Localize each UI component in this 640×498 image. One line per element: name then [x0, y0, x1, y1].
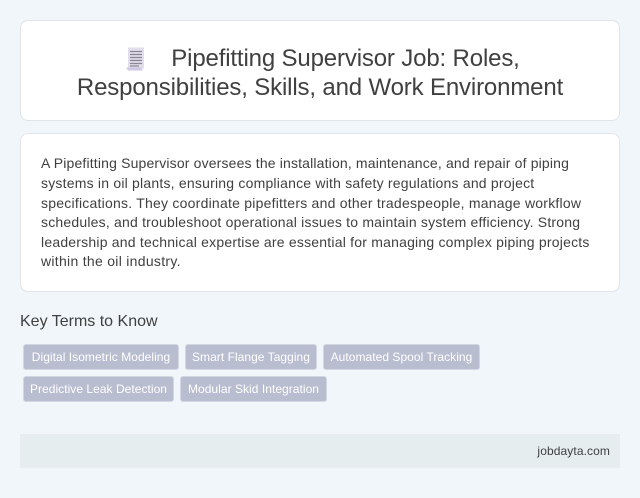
tag: digital isometric modeling [23, 344, 179, 370]
tag: predictive leak detection: Predictive Leak Detection [30, 382, 167, 396]
tag: modular skid integration [180, 376, 327, 402]
tag: modular skid integration: Modular Skid Integration [188, 382, 319, 396]
panel: title card [20, 20, 620, 121]
title: Responsibilities, Skills, and Work Environment [77, 74, 563, 101]
tag: digital isometric modeling: Digital Isometric Modeling [32, 350, 170, 364]
tag: smart flange tagging: Smart Flange Tagging [192, 350, 310, 364]
heading: key terms: Key Terms to Know [20, 313, 158, 330]
tag: automated spool tracking [323, 344, 480, 370]
text block: description: systems in oil plants, ensuring compliance with safety regulations and project [41, 175, 534, 191]
footer: site name: jobdayta.com [537, 444, 610, 458]
title [77, 45, 564, 101]
text block: description: leadership and technical expertise are essential for managing complex piping projects [41, 234, 590, 250]
tag: predictive leak detection [23, 376, 174, 402]
text block: description: A Pipefitting Supervisor oversees the installation, maintenance, and repair of piping [41, 155, 569, 171]
text block: description [41, 155, 590, 269]
title: Pipefitting Supervisor Job: Roles, [171, 45, 520, 72]
panel: description card [20, 133, 620, 292]
text block: description: specifications. They coordinate pipefitters and other tradespeople, manage workflow [41, 195, 581, 211]
text block: description: schedules, and troubleshoot operational issues to maintain system efficiency. Strong [41, 214, 580, 230]
footer bar [20, 434, 620, 468]
icon: document scroll [126, 48, 144, 70]
tag: smart flange tagging [185, 344, 317, 370]
tag: automated spool tracking: Automated Spool Tracking [331, 350, 472, 364]
tag list: key terms [23, 344, 480, 402]
text block: description: within the oil industry. [41, 253, 181, 269]
